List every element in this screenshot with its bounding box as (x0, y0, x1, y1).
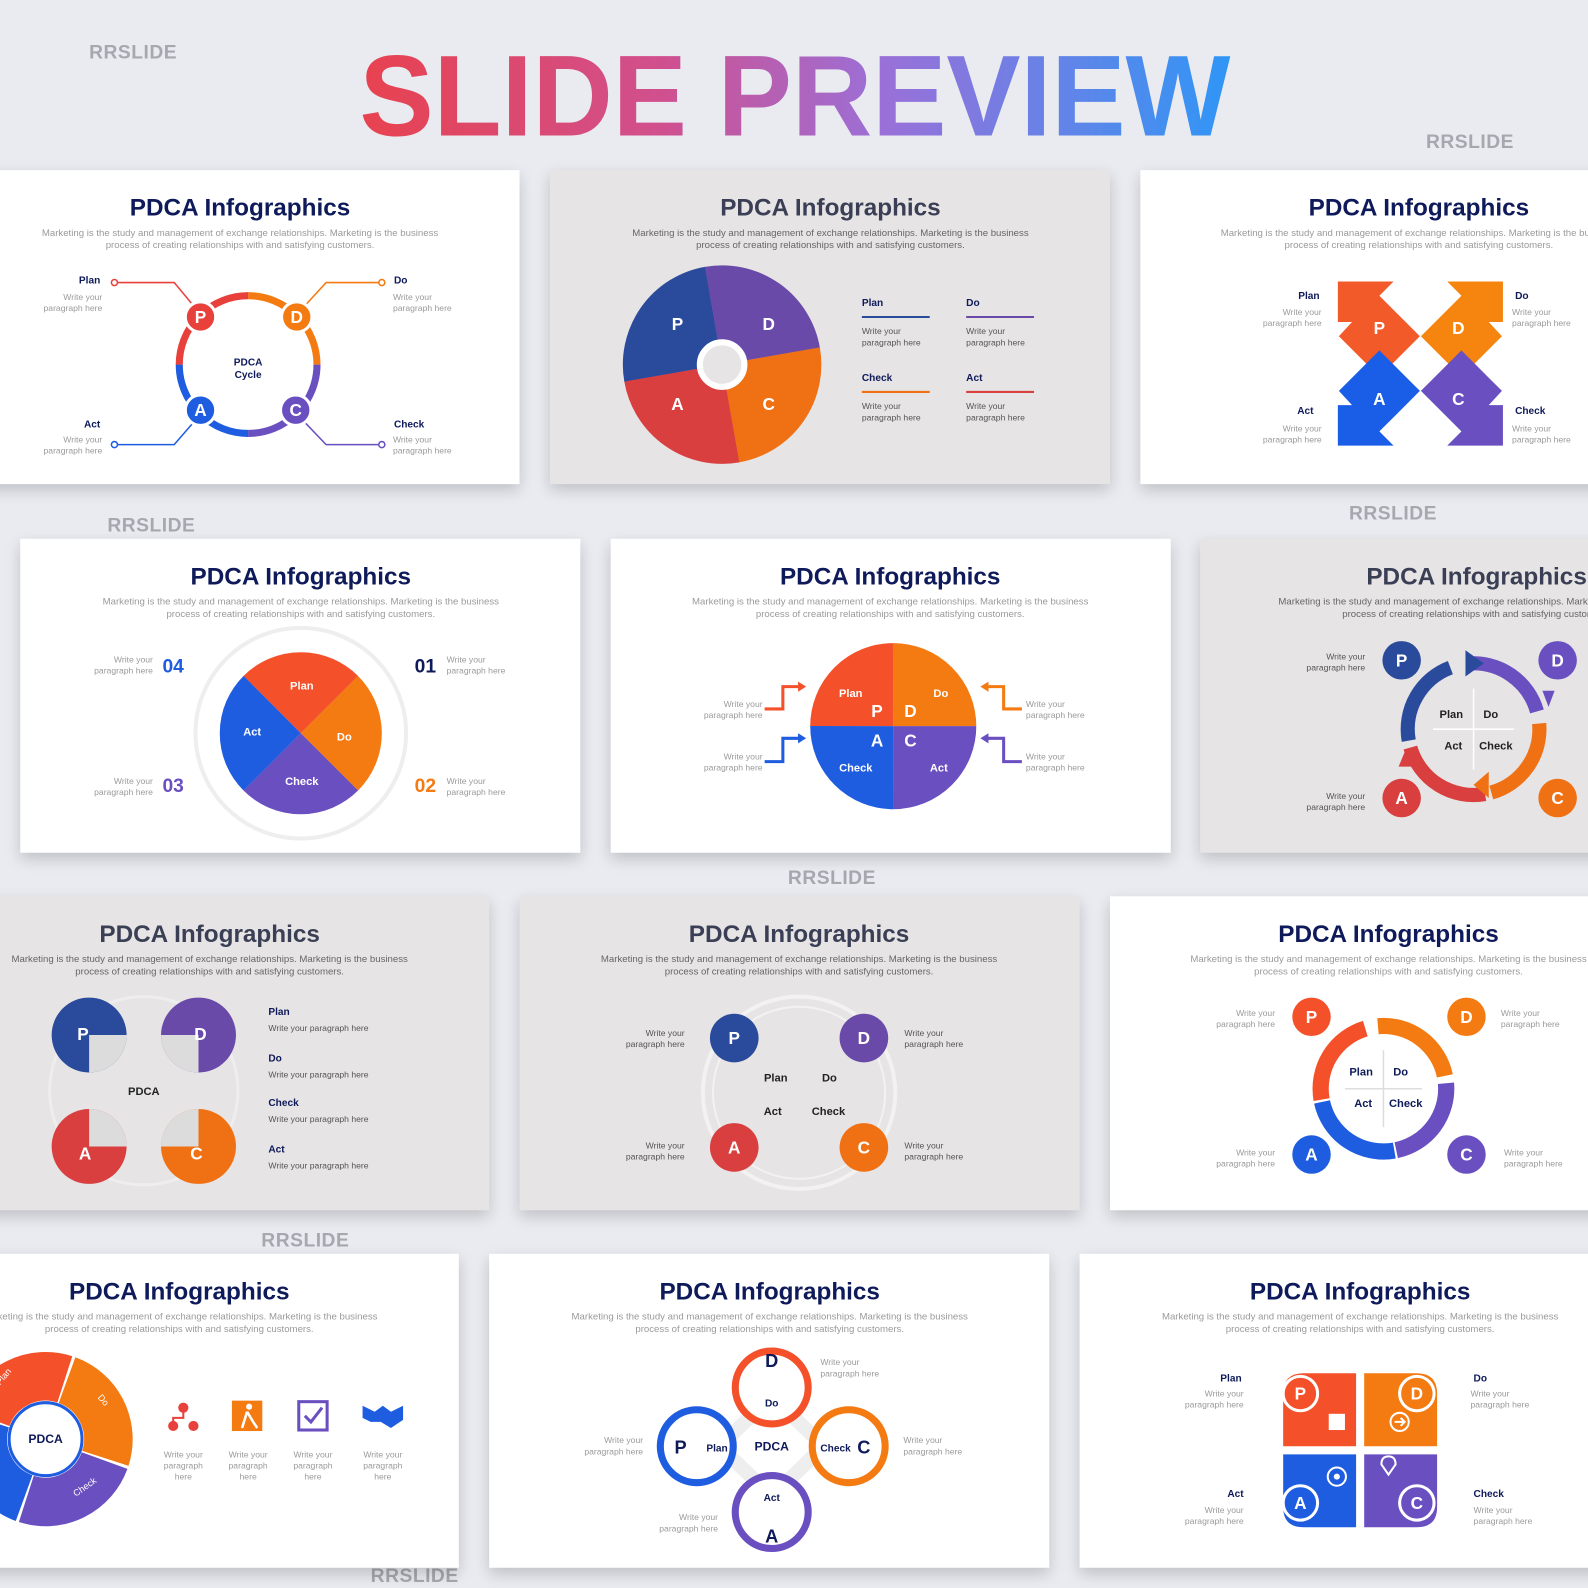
slide 9: arrow ring white: Write your (1236, 1008, 1275, 1018)
slide 3: arrow quadrants: Write your (1283, 423, 1322, 433)
slide 10: donut with icons: Check (71, 1475, 99, 1498)
slide 11: four rings diamond: paragraph here (903, 1446, 962, 1456)
slide 5: swirl circle with elbow arrows: Check (839, 763, 873, 775)
slide 2: PDCA pie with legend: paragraph here (862, 412, 921, 422)
slide 5: swirl circle with elbow arrows: Write your (1026, 752, 1065, 762)
slide 5: swirl circle with elbow arrows: Plan (839, 688, 863, 700)
slide 2: PDCA pie with legend: P (672, 314, 683, 334)
slide 12: quadrant square: C (1411, 1493, 1423, 1513)
slide 4: numbered pie: 04 (162, 656, 184, 677)
slide 5: swirl circle with elbow arrows: process of creating relationships with and satisfying customers. (756, 609, 1025, 620)
slide 10: donut with icons: Do (96, 1392, 111, 1408)
slide 12: quadrant square: Plan (1220, 1373, 1242, 1384)
slide 11: four rings diamond: P (674, 1437, 687, 1457)
slide 7: four circles with icons gray: PDCA Infographics (99, 921, 320, 948)
slide 5: swirl circle with elbow arrows: Write your (724, 699, 763, 709)
slide 11: four rings diamond: paragraph here (584, 1446, 643, 1456)
slide 5: swirl circle with elbow arrows: paragraph here (704, 710, 763, 720)
slide 11: four rings diamond: PDCA Infographics (659, 1278, 880, 1305)
slide 10: donut with icons: paragraph (363, 1461, 403, 1471)
slide 8: four colored dots with faint cycle gray: paragraph here (904, 1039, 963, 1049)
slide 1: PDCA cycle ring: Marketing is the study and management of exchange relationships. Marketing is the business (42, 228, 438, 239)
slide 5: swirl circle with elbow arrows: Act (930, 763, 948, 775)
slide 10: donut with icons: paragraph (164, 1461, 203, 1471)
slide 3: arrow quadrants: Write your (1283, 307, 1322, 317)
slide 2: PDCA pie with legend: Write your (862, 326, 901, 336)
slide 12: quadrant square (1080, 1254, 1588, 1568)
slide 7: four circles with icons gray: Do (268, 1053, 282, 1064)
slide 1: PDCA cycle ring: D (291, 307, 303, 327)
slide 4: numbered pie: Act (243, 726, 261, 738)
slide 12: quadrant square: Write your (1471, 1389, 1510, 1399)
slide 7: four circles with icons gray: P (77, 1024, 89, 1044)
watermark: RRSLIDE (788, 868, 876, 889)
slide 5: swirl circle with elbow arrows (611, 539, 1171, 853)
slide 10: donut with icons: PDCA (28, 1432, 63, 1446)
slide 5: swirl circle with elbow arrows: Write your (724, 752, 763, 762)
watermark: RRSLIDE (1426, 132, 1514, 153)
slide 8: four colored dots with faint cycle gray: Write your (904, 1140, 944, 1150)
slide 5: swirl circle with elbow arrows: C (904, 730, 917, 750)
slide 9: arrow ring white (1110, 896, 1588, 1210)
slide 3: arrow quadrants: Plan (1298, 291, 1320, 302)
slide 7: four circles with icons gray: D (194, 1024, 207, 1044)
slide 1: PDCA cycle ring: Do (394, 276, 407, 287)
slide 10: donut with icons: here (175, 1472, 192, 1482)
slide 4: numbered pie: Do (337, 731, 352, 743)
slide 11: four rings diamond: Check (820, 1443, 851, 1454)
slide 10: donut with icons: Write your (363, 1449, 402, 1459)
slide 5: swirl circle with elbow arrows: paragraph here (1026, 710, 1085, 720)
slide 12: quadrant square: process of creating relationships with and satisfying customers. (1226, 1324, 1494, 1335)
slide 10: donut with icons: Write your (229, 1449, 268, 1459)
slide 9: arrow ring white: paragraph here (1504, 1159, 1563, 1169)
slide 8: four colored dots with faint cycle gray: Plan (764, 1073, 788, 1085)
slide 4: numbered pie: process of creating relationships with and satisfying customers. (166, 609, 435, 620)
slide 9: arrow ring white: process of creating relationships with and satisfying customers. (1254, 966, 1523, 977)
slide 11: four rings diamond: paragraph here (659, 1523, 718, 1533)
slide 8: four colored dots with faint cycle gray: process of creating relationships with and satisfying customers. (665, 966, 933, 977)
slide 7: four circles with icons gray: process of creating relationships with and satisfying customers. (75, 966, 344, 977)
slide 5: swirl circle with elbow arrows: Do (933, 688, 948, 700)
slide 9: arrow ring white: D (1460, 1007, 1473, 1027)
slide 10: donut with icons: Write your (164, 1449, 203, 1459)
slide 1: PDCA cycle ring: paragraph here (393, 303, 452, 313)
slide 1: PDCA cycle ring: A (194, 400, 207, 420)
slide 12: quadrant square: P (1295, 1384, 1306, 1404)
slide 8: four colored dots with faint cycle gray: P (729, 1028, 740, 1048)
slide 8: four colored dots with faint cycle gray: paragraph here (904, 1152, 963, 1162)
slide 9: arrow ring white: P (1306, 1007, 1317, 1027)
slide 3: arrow quadrants: paragraph here (1263, 435, 1322, 445)
slide 5: swirl circle with elbow arrows: A (871, 730, 883, 750)
slide 1: PDCA cycle ring: Write your (393, 435, 432, 445)
slide 10: donut with icons: PDCA Infographics (69, 1278, 290, 1305)
slide 9: arrow ring white: Write your (1504, 1148, 1543, 1158)
slide 1: PDCA cycle ring: Cycle (235, 370, 262, 381)
slide 8: four colored dots with faint cycle gray: Marketing is the study and management of exchange relationships. Marketing is the business (601, 954, 997, 965)
slide 6: arrow ring gray: PDCA Infographics (1366, 563, 1587, 590)
slide 12: quadrant square: Do (1474, 1373, 1487, 1384)
slide 9: arrow ring white: Write your (1501, 1008, 1540, 1018)
slide 1: PDCA cycle ring: paragraph here (393, 446, 452, 456)
slide 4: numbered pie: 02 (415, 776, 436, 797)
slide 3: arrow quadrants: process of creating relationships with and satisfying customers. (1285, 240, 1553, 251)
slide 8: four colored dots with faint cycle gray: paragraph here (626, 1152, 685, 1162)
slide 5: swirl circle with elbow arrows: paragraph here (1026, 763, 1085, 773)
slide 11: four rings diamond: A (765, 1526, 778, 1546)
slide 2: PDCA pie with legend: process of creating relationships with and satisfying customers. (696, 240, 965, 251)
slide 8: four colored dots with faint cycle gray: Check (812, 1106, 846, 1118)
slide 8: four colored dots with faint cycle gray (520, 896, 1080, 1210)
slide 1: PDCA cycle ring: process of creating relationships with and satisfying customers. (106, 240, 374, 251)
slide 10: donut with icons: paragraph (293, 1461, 333, 1471)
slide 1: PDCA cycle ring: Act (84, 419, 101, 430)
slide 12: quadrant square: paragraph here (1185, 1516, 1244, 1526)
slide 3: arrow quadrants: C (1452, 389, 1465, 409)
slide 11: four rings diamond: process of creating relationships with and satisfying customers. (635, 1324, 904, 1335)
slide 10: donut with icons: here (304, 1472, 322, 1482)
slide 4: numbered pie: paragraph here (447, 665, 506, 675)
slide 5: swirl circle with elbow arrows: Marketing is the study and management of exchange relationships. Marketing is the business (692, 597, 1089, 608)
slide 5: swirl circle with elbow arrows: paragraph here (704, 763, 763, 773)
slide 2: PDCA pie with legend: A (671, 394, 684, 414)
slide 7: four circles with icons gray: A (79, 1144, 91, 1164)
slide 5: swirl circle with elbow arrows: PDCA Infographics (780, 563, 1000, 590)
slide 7: four circles with icons gray: Write your paragraph here (268, 1161, 369, 1171)
slide 11: four rings diamond (489, 1254, 1049, 1568)
slide 10: donut with icons: here (240, 1472, 257, 1482)
slide 9: arrow ring white: PDCA Infographics (1278, 921, 1499, 948)
slide 3: arrow quadrants: Do (1515, 291, 1529, 302)
slide 11: four rings diamond: Act (764, 1493, 780, 1504)
slide 9: arrow ring white: paragraph here (1501, 1019, 1560, 1029)
slide 8: four colored dots with faint cycle gray: Write your (646, 1140, 685, 1150)
slide 3: arrow quadrants: paragraph here (1512, 435, 1571, 445)
slide 9: arrow ring white: Plan (1349, 1067, 1373, 1079)
slide 2: PDCA pie with legend (550, 170, 1110, 484)
slide 2: PDCA pie with legend: PDCA Infographics (720, 195, 941, 222)
watermark: RRSLIDE (261, 1231, 349, 1252)
slide 7: four circles with icons gray: Act (268, 1145, 285, 1156)
slide 12: quadrant square: paragraph here (1471, 1400, 1530, 1410)
slide 6: arrow ring gray: P (1396, 650, 1407, 670)
slide 9: arrow ring white: Act (1354, 1098, 1372, 1110)
slide 4: numbered pie: Plan (290, 681, 314, 693)
slide 1: PDCA cycle ring: C (290, 400, 302, 420)
slide 1: PDCA cycle ring: PDCA (234, 358, 263, 369)
slide 7: four circles with icons gray: Write your paragraph here (268, 1070, 369, 1080)
slide 2: PDCA pie with legend: Plan (862, 298, 883, 309)
slide 11: four rings diamond: Write your (679, 1512, 718, 1522)
slide 4: numbered pie: 03 (162, 776, 184, 797)
slide 7: four circles with icons gray: Marketing is the study and management of exchange relationships. Marketing is the business (11, 954, 408, 965)
slide 12: quadrant square: paragraph here (1185, 1400, 1244, 1410)
slide 6: arrow ring gray: Plan (1440, 709, 1463, 721)
slide 5: swirl circle with elbow arrows: P (871, 701, 883, 721)
slide 12: quadrant square: Write your (1205, 1389, 1244, 1399)
slide 7: four circles with icons gray: Write your paragraph here (268, 1023, 369, 1033)
slide 12: quadrant square: Write your (1205, 1505, 1244, 1515)
slide 7: four circles with icons gray: C (190, 1144, 203, 1164)
slide 6: arrow ring gray: A (1395, 788, 1408, 808)
slide 4: numbered pie: 01 (415, 656, 436, 677)
slide 2: PDCA pie with legend: Write your (862, 401, 901, 411)
slide 4: numbered pie: Write your (114, 654, 153, 664)
slide 4: numbered pie: Write your (447, 654, 486, 664)
slide 9: arrow ring white: Marketing is the study and management of exchange relationships. Marketing is the business (1190, 954, 1587, 965)
slide 2: PDCA pie with legend: Write your (966, 401, 1005, 411)
slide 8: four colored dots with faint cycle gray: Do (822, 1073, 837, 1085)
slide 1: PDCA cycle ring: Check (394, 419, 425, 430)
slide 4: numbered pie: paragraph here (94, 665, 153, 675)
slide 3: arrow quadrants: PDCA Infographics (1309, 195, 1529, 222)
slide 6: arrow ring gray: Write your (1326, 651, 1365, 661)
slide 6: arrow ring gray: C (1551, 788, 1564, 808)
slide 8: four colored dots with faint cycle gray: A (728, 1138, 740, 1158)
slide 5: swirl circle with elbow arrows: Write your (1026, 699, 1065, 709)
slide 3: arrow quadrants: paragraph here (1263, 318, 1322, 328)
slide 12: quadrant square: Marketing is the study and management of exchange relationships. Marketing is the business (1162, 1312, 1559, 1323)
slide 3: arrow quadrants: Act (1297, 406, 1314, 417)
slide 10: donut with icons: here (374, 1472, 392, 1482)
slide 4: numbered pie: PDCA Infographics (191, 563, 411, 590)
slide 5: swirl circle with elbow arrows: D (904, 701, 917, 721)
slide 3: arrow quadrants (1140, 170, 1588, 484)
slide 3: arrow quadrants: Write your (1512, 423, 1551, 433)
slide 12: quadrant square: Check (1474, 1489, 1504, 1500)
slide 9: arrow ring white: paragraph here (1216, 1019, 1275, 1029)
slide 12: quadrant square: paragraph here (1474, 1516, 1533, 1526)
slide 7: four circles with icons gray: Check (268, 1098, 299, 1109)
slide 1: PDCA cycle ring: P (195, 307, 206, 327)
slide 6: arrow ring gray: Check (1479, 740, 1513, 752)
slide 2: PDCA pie with legend: paragraph here (862, 337, 921, 347)
slide 3: arrow quadrants: Write your (1512, 307, 1551, 317)
slide 7: four circles with icons gray (0, 896, 489, 1210)
slide 4: numbered pie (20, 539, 580, 853)
slide 11: four rings diamond: Write your (903, 1435, 943, 1445)
slide 4: numbered pie: Write your (447, 776, 486, 786)
watermark: RRSLIDE (107, 515, 195, 537)
slide 1: PDCA cycle ring: Write your (393, 292, 432, 302)
slide 9: arrow ring white: Do (1393, 1067, 1408, 1079)
slide 1: PDCA cycle ring: paragraph here (44, 303, 102, 313)
slide 6: arrow ring gray: D (1551, 650, 1564, 670)
slide 9: arrow ring white: Check (1389, 1098, 1423, 1110)
slide 4: numbered pie: paragraph here (94, 787, 153, 797)
slide 3: arrow quadrants: paragraph here (1512, 318, 1571, 328)
slide 6: arrow ring gray: Write your (1326, 791, 1365, 801)
slide 8: four colored dots with faint cycle gray: Act (764, 1106, 782, 1118)
slide 9: arrow ring white: C (1460, 1145, 1473, 1165)
slide 11: four rings diamond: Plan (706, 1443, 728, 1454)
slide 8: four colored dots with faint cycle gray: D (858, 1028, 870, 1048)
watermark: RRSLIDE (1349, 503, 1437, 525)
slide 8: four colored dots with faint cycle gray: Write your (646, 1028, 685, 1038)
slide 12: quadrant square: D (1411, 1384, 1423, 1404)
slide 6: arrow ring gray: Act (1444, 740, 1463, 752)
slide 12: quadrant square: Write your (1474, 1505, 1513, 1515)
slide 4: numbered pie: Check (285, 776, 319, 788)
slide 2: PDCA pie with legend: D (762, 314, 775, 334)
slide 11: four rings diamond: Do (765, 1399, 778, 1410)
slide 6: arrow ring gray: paragraph here (1306, 662, 1365, 672)
slide 7: four circles with icons gray: Write your paragraph here (268, 1114, 369, 1124)
slide 10: donut with icons: paragraph (229, 1461, 268, 1471)
slide 11: four rings diamond: paragraph here (820, 1368, 879, 1378)
slide 11: four rings diamond: Marketing is the study and management of exchange relationships. Marketing is the business (572, 1312, 968, 1323)
slide 2: PDCA pie with legend: Marketing is the study and management of exchange relationships. Marketing is the business (632, 228, 1029, 239)
slide 2: PDCA pie with legend: C (762, 394, 775, 414)
slide 9: arrow ring white: Write your (1236, 1148, 1275, 1158)
slide 8: four colored dots with faint cycle gray: Write your (904, 1028, 944, 1038)
slide 2: PDCA pie with legend: Write your (966, 326, 1005, 336)
slide 12: quadrant square: A (1294, 1493, 1307, 1513)
watermark: RRSLIDE (371, 1566, 459, 1587)
slide 7: four circles with icons gray: PDCA (128, 1086, 160, 1098)
slide 1: PDCA cycle ring: Write your (63, 435, 102, 445)
slide 8: four colored dots with faint cycle gray: paragraph here (626, 1039, 685, 1049)
slide 11: four rings diamond: PDCA (755, 1439, 789, 1453)
slide 1: PDCA cycle ring: paragraph here (44, 446, 102, 456)
slide 2: PDCA pie with legend: paragraph here (966, 337, 1025, 347)
slide 2: PDCA pie with legend: Act (966, 373, 983, 384)
slide 1: PDCA cycle ring: PDCA Infographics (130, 195, 350, 222)
slide 10: donut with icons (0, 1254, 459, 1568)
slide 4: numbered pie: Write your (114, 776, 153, 786)
slide 1: PDCA cycle ring: Write your (63, 292, 102, 302)
slide 11: four rings diamond: C (857, 1437, 870, 1457)
slide 4: numbered pie: Marketing is the study and management of exchange relationships. Marketing is the business (103, 597, 499, 608)
slide 11: four rings diamond: Write your (604, 1435, 643, 1445)
slide 10: donut with icons: process of creating relationships with and satisfying customers. (45, 1324, 314, 1335)
slide 2: PDCA pie with legend: Check (862, 373, 893, 384)
slide 3: arrow quadrants: A (1373, 389, 1386, 409)
slide 8: four colored dots with faint cycle gray: PDCA Infographics (689, 921, 909, 948)
slide 11: four rings diamond: D (765, 1351, 778, 1371)
slide 3: arrow quadrants: P (1374, 318, 1385, 338)
slide 8: four colored dots with faint cycle gray: C (858, 1138, 870, 1158)
slide 9: arrow ring white: A (1305, 1145, 1318, 1165)
slide 12: quadrant square: Act (1227, 1489, 1244, 1500)
slide 2: PDCA pie with legend: Do (966, 298, 980, 309)
slide 6: arrow ring gray: Do (1483, 709, 1498, 721)
slide 6: arrow ring gray (1200, 539, 1588, 853)
slide 10: donut with icons: Write your (293, 1449, 333, 1459)
slide 1: PDCA cycle ring (0, 170, 520, 484)
watermark: RRSLIDE (89, 43, 177, 64)
slide 7: four circles with icons gray: Plan (268, 1007, 290, 1018)
slide 2: PDCA pie with legend: paragraph here (966, 412, 1025, 422)
slide 3: arrow quadrants: D (1452, 318, 1465, 338)
slide 12: quadrant square: PDCA Infographics (1250, 1278, 1470, 1305)
slide 4: numbered pie: paragraph here (447, 787, 506, 797)
slide 11: four rings diamond: Write your (820, 1357, 859, 1367)
slide 6: arrow ring gray: paragraph here (1306, 802, 1365, 812)
slide 1: PDCA cycle ring: Plan (79, 276, 100, 287)
slide 9: arrow ring white: paragraph here (1216, 1159, 1275, 1169)
slide 3: arrow quadrants: Check (1515, 406, 1546, 417)
